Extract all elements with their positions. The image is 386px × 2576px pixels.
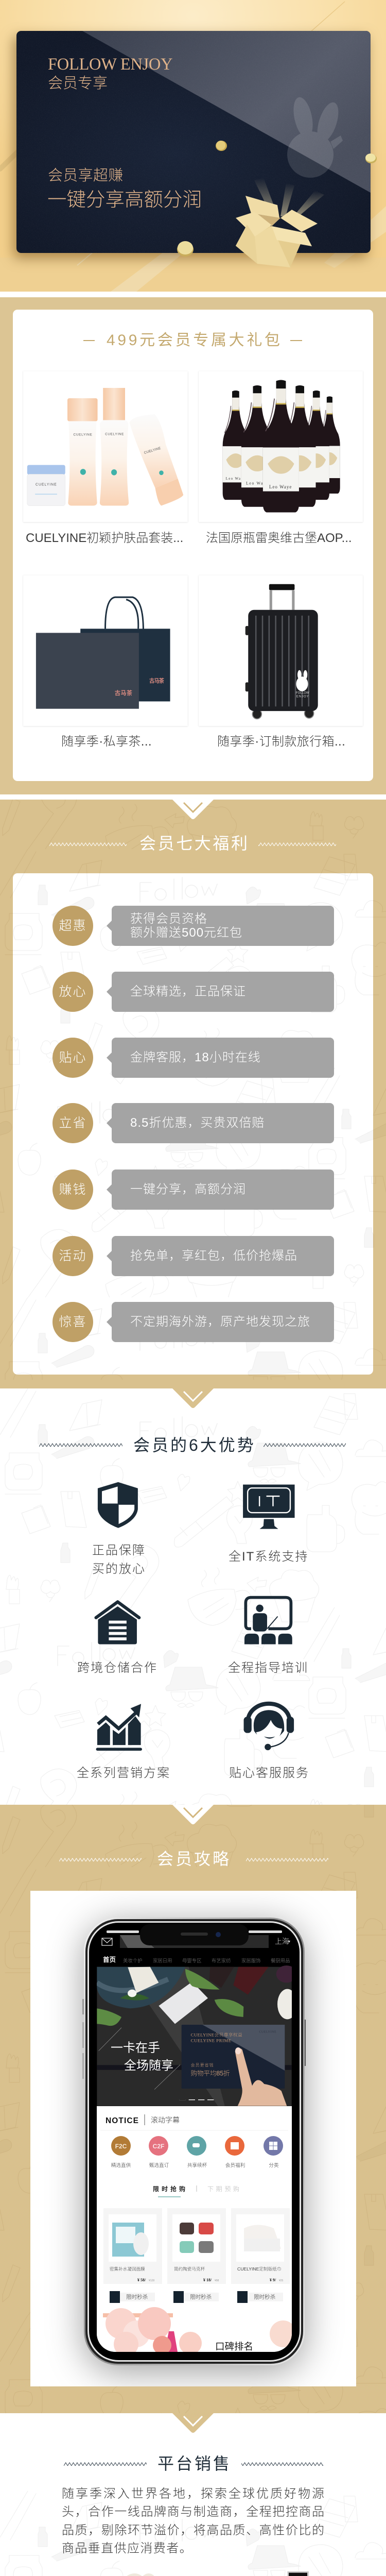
logo: Cle de Peau — [125, 2575, 171, 2576]
product: travel suitcase: ENJOY — [296, 694, 309, 698]
product: wine bottles — [199, 371, 363, 522]
category icons — [111, 2136, 283, 2168]
advantage label 2: 全IT系统支持 — [229, 1550, 308, 1564]
icon: IT monitor — [243, 1485, 295, 1529]
product label 2: 法国原瓶雷奥维古堡AOP... — [206, 531, 352, 545]
heading zigzags — [59, 1858, 328, 1862]
benefits white card — [13, 873, 373, 1375]
chevron — [172, 1388, 214, 1408]
panel: member guide section — [0, 1805, 386, 2413]
phone shadow — [84, 1918, 305, 2365]
description — [112, 906, 334, 946]
white phone panel — [30, 1891, 356, 2386]
product card: ceramic mugs: 简约陶瓷马克杯 — [174, 2266, 205, 2272]
flash-sale tabs: 限时抢购 — [153, 2185, 185, 2193]
category icons: 精选直供 — [111, 2162, 131, 2168]
nav tabs: 布艺家纺 — [212, 1958, 231, 1963]
tag — [52, 1302, 93, 1342]
doodle background — [0, 1805, 386, 2413]
product: wine bottles: Leo Wa — [246, 481, 263, 485]
heading: six advantages: 会员的6大优势 — [133, 1436, 256, 1454]
doodle background — [13, 873, 373, 1375]
tag — [52, 1236, 93, 1276]
category icons: 分类 — [269, 2162, 279, 2168]
category icons: 共享续杯 — [187, 2162, 207, 2168]
hero panel — [0, 0, 386, 292]
icon: training — [244, 1598, 292, 1644]
tag — [52, 972, 93, 1012]
chevron — [172, 2413, 214, 2433]
hero banner: 会员更省钱 — [191, 2062, 214, 2067]
status bar: 上海 — [275, 1937, 289, 1945]
tag — [52, 1170, 93, 1210]
product card: face mask: ¥128 — [149, 2279, 154, 2282]
benefit row 2 — [52, 972, 334, 1012]
description — [112, 1103, 334, 1143]
chevron — [172, 1805, 214, 1824]
tag: 赚钱 — [59, 1182, 86, 1197]
intro paragraph — [62, 2487, 324, 2555]
nav tabs: 餐厨用品 — [271, 1958, 290, 1963]
hero tagline 1: 会员享超赚 — [48, 167, 124, 184]
heading: member guide: 会员攻略 — [157, 1850, 231, 1868]
app content — [97, 2106, 292, 2353]
tag: 放心 — [59, 985, 86, 999]
intro paragraph: 头，合作一线品牌商与制造商，全程把控商品 — [62, 2505, 324, 2519]
tag — [52, 906, 93, 946]
benefit row 1 — [52, 906, 334, 946]
tag: 惊喜 — [59, 1315, 86, 1329]
advantage label 6: 贴心客服服务 — [229, 1766, 309, 1780]
hero banner: 一卡在手 — [111, 2041, 160, 2055]
notice bar — [100, 2114, 288, 2130]
description — [112, 1170, 334, 1210]
icon: growth chart — [96, 1704, 142, 1751]
description — [112, 1236, 334, 1276]
description — [112, 972, 334, 1012]
advantage icons — [94, 1482, 295, 1751]
product card: tissue: ¥25 — [279, 2279, 284, 2282]
icon: shield — [98, 1482, 138, 1528]
tag: 贴心 — [59, 1050, 86, 1065]
advantage label 1: 正品保障 — [92, 1544, 146, 1557]
intro paragraph: 商品垂直供应消费者。 — [62, 2541, 192, 2555]
nav tabs: 首页 — [103, 1956, 116, 1963]
flash-sale tabs: 下期预购 — [207, 2185, 239, 2193]
product: tea gift box and bag — [23, 575, 188, 726]
flash-sale tabs — [153, 2185, 239, 2197]
description: 一键分享，高额分润 — [130, 1182, 246, 1196]
panel: seven benefits section — [0, 800, 386, 1388]
product images — [23, 371, 363, 726]
chevron — [172, 800, 214, 819]
product card: ceramic mugs: ¥ 18/ — [203, 2278, 212, 2282]
buy buttons — [110, 2291, 283, 2303]
nav tabs: 美妆个护 — [123, 1958, 143, 1963]
doodle background — [0, 2491, 386, 2576]
heading zigzags — [49, 842, 336, 846]
description: 金牌客服，18小时在线 — [130, 1050, 261, 1064]
status bar — [102, 1924, 290, 1948]
category icons: F2C — [115, 2143, 127, 2150]
icon: coins — [177, 141, 377, 257]
product: skincare set: CUELYINE — [105, 432, 124, 436]
heading dashes — [83, 340, 302, 341]
icon: customer service headset — [244, 1704, 294, 1750]
benefit row 3 — [52, 1038, 334, 1078]
advantage label 3: 跨境仓储合作 — [77, 1661, 157, 1675]
heading: gift package: 499元会员专属大礼包 — [107, 332, 283, 349]
hero banner — [97, 1965, 297, 2106]
buy buttons: 限时秒杀 — [126, 2294, 148, 2300]
benefit row 4 — [52, 1103, 334, 1143]
description: 不定期海外游，原产地发现之旅 — [130, 1315, 310, 1329]
intro paragraph: 品质，剔除环节溢价，将高品质、高性价比的 — [62, 2523, 324, 2537]
nav tabs — [103, 1956, 290, 1963]
description: 8.5折优惠，买贵双倍赔 — [130, 1116, 265, 1130]
product: skincare set: CUELYINE — [144, 446, 162, 455]
card: gift package — [13, 310, 373, 781]
product card: tissue: CUELYINE定制版纸巾 — [237, 2266, 281, 2272]
product card: tissue: ¥ 9/ — [270, 2278, 276, 2282]
product label 1: CUELYINE初颖护肤品套装... — [26, 531, 183, 545]
hero dark card — [16, 31, 371, 253]
buy buttons: 限时秒杀 — [190, 2294, 212, 2300]
category icons: 甄选直订 — [149, 2162, 169, 2168]
category icons: C2F — [153, 2143, 164, 2150]
nav tabs: 家居服饰 — [241, 1958, 261, 1963]
tag: 超惠 — [59, 919, 86, 933]
hero tagline 2: 一键分享高额分润 — [47, 189, 202, 210]
product: travel suitcase: FOLLOW — [296, 691, 309, 695]
product: tea gift box and bag: 古马茶 — [149, 677, 165, 684]
description — [112, 1302, 334, 1342]
icon: rabbit silhouette — [287, 95, 343, 178]
decorative stripes — [0, 1, 386, 292]
description: 抢免单，享红包，低价抢爆品 — [130, 1249, 297, 1263]
benefit row 5 — [52, 1170, 334, 1210]
product card: ceramic mugs: ¥98 — [215, 2279, 219, 2282]
panel: six advantages section — [0, 1388, 386, 1805]
status bar: ▾ — [288, 1939, 290, 1944]
tag: 活动 — [59, 1249, 86, 1263]
hero english heading: FOLLOW ENJOY — [48, 55, 172, 74]
heading: platform sales: 平台销售 — [157, 2454, 232, 2473]
advantage label 1 — [92, 1544, 146, 1576]
product card: face mask — [103, 2208, 162, 2284]
icon: warehouse — [96, 1602, 139, 1644]
promo banner — [97, 2307, 292, 2352]
icon: open gift box — [236, 180, 324, 267]
advantage label 4: 全程指导培训 — [228, 1661, 308, 1675]
product label 4: 随享季·订制款旅行箱... — [217, 735, 345, 749]
product: wine bottles: Leo Waye — [269, 484, 291, 489]
product: skincare set — [23, 371, 188, 522]
promo banner: 口碑排名 — [215, 2341, 253, 2352]
hero subheading: 会员专享 — [48, 75, 108, 92]
notice bar: 滚动字幕 — [151, 2116, 180, 2124]
heading zigzags — [64, 2462, 323, 2466]
hero banner: CUELYINE PRIME — [191, 2038, 231, 2043]
description: 额外赠送500元红包 — [130, 926, 242, 940]
product: skincare set: CUELYINE — [36, 483, 57, 487]
tag: 立省 — [59, 1116, 86, 1130]
heading zigzags — [39, 1443, 346, 1447]
product card: face mask: 密集补水凝润面膜 — [110, 2266, 145, 2272]
tag — [52, 1038, 93, 1078]
hero banner: CUELYINE会员尊享权益 — [191, 2031, 242, 2037]
benefit row 6 — [52, 1236, 334, 1276]
product: skincare set: CUELYINE — [74, 433, 92, 436]
intro paragraph: 随享季深入世界各地，探索全球优质好物源 — [62, 2487, 324, 2501]
product card: face mask: ¥ 58/ — [137, 2278, 146, 2282]
brand logo wall — [62, 2568, 324, 2576]
notice bar: NOTICE — [106, 2116, 138, 2125]
buy buttons: 限时秒杀 — [254, 2294, 275, 2300]
panel: gift package section — [0, 297, 386, 794]
phone body — [82, 1918, 306, 2365]
nav tabs: 家居日用 — [153, 1958, 172, 1963]
advantage label 5: 全系列营销方案 — [77, 1766, 170, 1780]
product label 3: 随享季·私享茶... — [61, 735, 152, 749]
product: tea gift box and bag: 古马茶 — [115, 689, 133, 697]
logo: Estee Lauder — [276, 2571, 320, 2576]
description — [112, 1038, 334, 1078]
doodle background — [0, 800, 386, 1380]
hero banner: 全场随享 — [124, 2059, 173, 2073]
hero banner: 购物平均85折 — [191, 2070, 230, 2077]
panel: platform sales section — [0, 2413, 386, 2576]
product: wine bottles: Leo Wa — [226, 477, 240, 481]
product card: ceramic mugs — [167, 2208, 226, 2284]
nav tabs: 母婴专区 — [182, 1958, 202, 1963]
advantage label 1: 买的放心 — [92, 1562, 146, 1576]
doodle background — [0, 1388, 386, 1805]
heading: seven benefits: 会员七大福利 — [139, 834, 250, 853]
product card: tissue — [231, 2208, 290, 2284]
phone mockup — [82, 1918, 306, 2365]
benefit row 7 — [52, 1302, 334, 1342]
tag — [52, 1103, 93, 1143]
product: travel suitcase — [199, 575, 363, 726]
category icons: 会员福利 — [225, 2162, 245, 2168]
hero banner: CUELYINE — [259, 2031, 276, 2034]
description: 获得会员资格 — [130, 912, 207, 926]
description: 全球精选，正品保证 — [130, 985, 246, 998]
